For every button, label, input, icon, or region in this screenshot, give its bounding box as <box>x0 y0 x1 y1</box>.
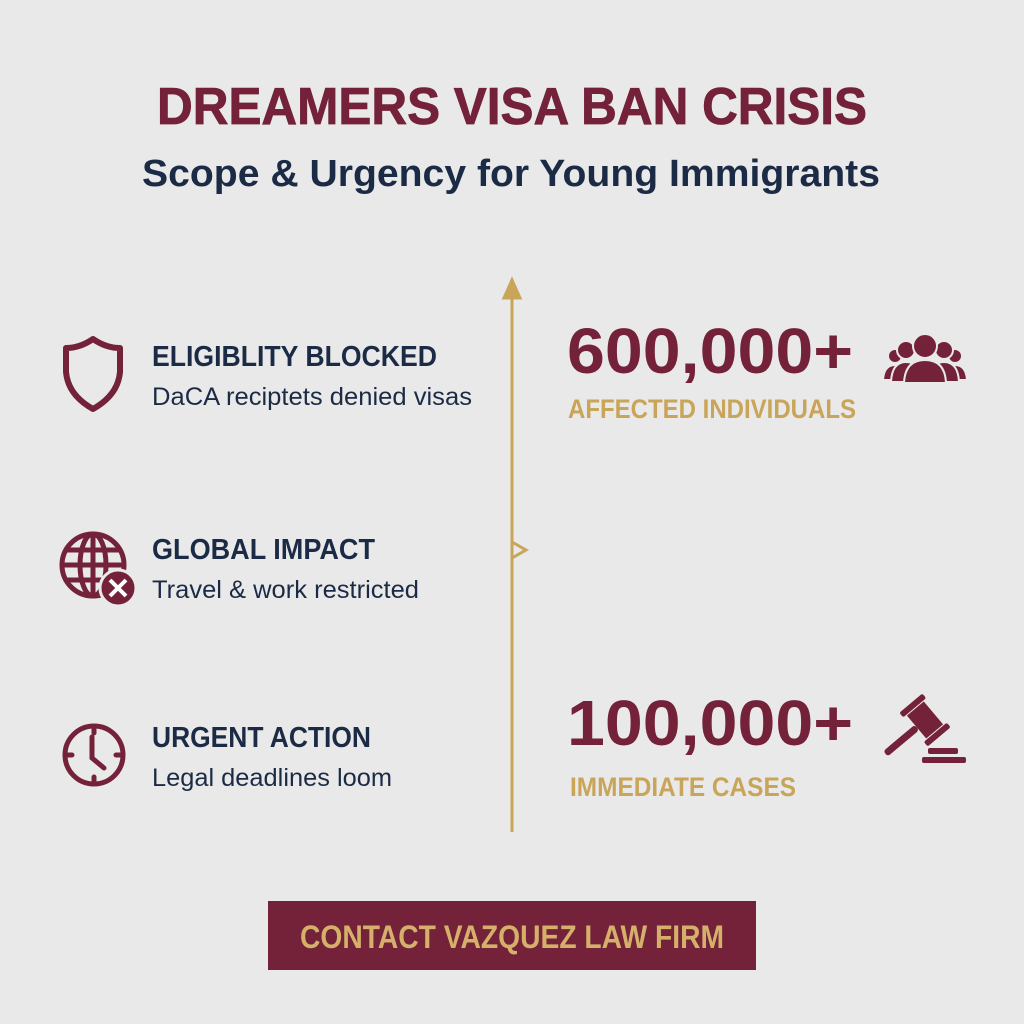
text: global impact: Travel & work restricted <box>152 576 419 604</box>
stat: 600,000+ <box>567 315 967 424</box>
icon: gavel <box>871 694 966 770</box>
icon: people group <box>883 334 967 383</box>
stat: 600,000+: 600,000+ <box>567 315 853 387</box>
stat: 600,000+: AFFECTED INDIVIDUALS <box>568 394 856 424</box>
title: DREAMERS VISA BAN CRISIS <box>157 78 867 136</box>
heading: global impact: GLOBAL IMPACT <box>152 534 375 566</box>
item: global impact <box>62 534 419 606</box>
stat: 100,000+: IMMEDIATE CASES <box>570 772 796 802</box>
button: contact: CONTACT VAZQUEZ LAW FIRM <box>300 919 724 955</box>
icon: clock <box>65 726 123 784</box>
timeline arrow <box>504 280 526 832</box>
heading: eligibility blocked: ELIGIBLITY BLOCKED <box>152 341 437 373</box>
stat: 100,000+: 100,000+ <box>567 687 853 759</box>
text: eligibility: DaCA reciptets denied visas <box>152 383 472 411</box>
heading: urgent action: URGENT ACTION <box>152 722 371 754</box>
subtitle: Scope & Urgency for Young Immigrants <box>142 153 880 195</box>
text: urgent action: Legal deadlines loom <box>152 764 392 792</box>
item: eligibility blocked <box>66 339 472 411</box>
stat: 100,000+ <box>567 687 966 802</box>
icon: shield <box>66 339 120 409</box>
icon: globe with x <box>62 534 124 596</box>
item: urgent action <box>65 722 392 792</box>
button: contact <box>268 901 756 970</box>
